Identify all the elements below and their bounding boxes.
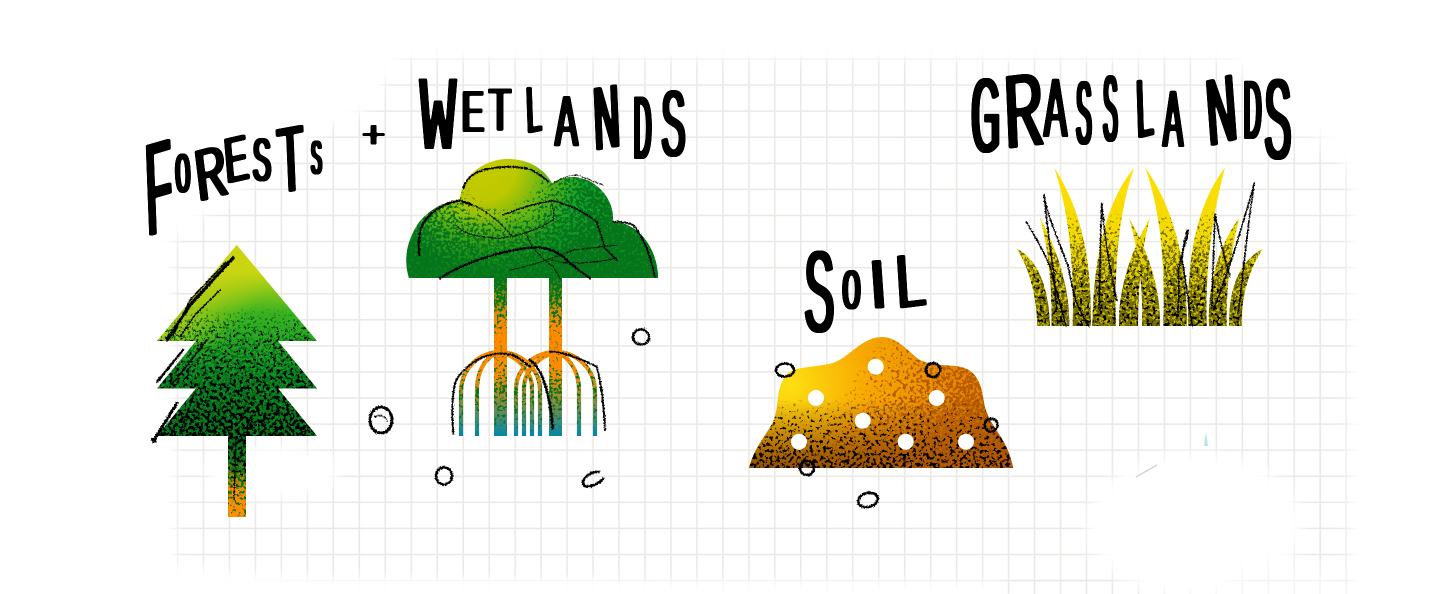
heading: forests + wetlands: S bbox=[311, 133, 322, 190]
heading: forests + wetlands: S bbox=[252, 129, 272, 201]
heading: grasslands: L bbox=[1130, 66, 1157, 166]
heading: forests + wetlands: O bbox=[171, 146, 193, 212]
heading: grasslands: A bbox=[1163, 76, 1183, 173]
heading: forests + wetlands: E bbox=[218, 125, 254, 205]
grass pencil strokes bbox=[1027, 183, 1254, 327]
heading: grasslands: D bbox=[1243, 67, 1262, 166]
mangrove pencil strokes bbox=[419, 167, 655, 433]
heading: grasslands: N bbox=[1197, 61, 1244, 178]
heading: forests + wetlands: F bbox=[134, 120, 180, 279]
heading: forests + wetlands: D bbox=[633, 80, 652, 188]
heading: forests + wetlands: A bbox=[555, 83, 578, 169]
heading: soil: L bbox=[889, 240, 931, 334]
pine tree pencil strokes bbox=[152, 258, 236, 500]
heading: forests + wetlands: L bbox=[521, 76, 545, 156]
heading: grasslands: G bbox=[970, 61, 1001, 186]
heading: soil: I bbox=[866, 245, 890, 324]
heading: forests + wetlands: T bbox=[488, 79, 512, 151]
icon: soil mound bbox=[745, 335, 1017, 470]
heading: forests + wetlands: E bbox=[461, 80, 485, 151]
faint teal and pencil remnants bbox=[1136, 432, 1208, 477]
heading: forests + wetlands: W bbox=[420, 61, 456, 182]
heading: grasslands: S bbox=[1076, 65, 1092, 173]
heading: grasslands bbox=[970, 55, 1292, 196]
mangrove trunks and roots bbox=[458, 278, 598, 436]
heading: grasslands: S bbox=[1103, 60, 1118, 171]
heading: grasslands: A bbox=[1044, 65, 1067, 164]
icon: mangrove tree bbox=[400, 155, 665, 440]
heading: forests + wetlands: N bbox=[587, 70, 624, 180]
icon: pine tree bbox=[150, 240, 325, 520]
heading: soil bbox=[804, 230, 931, 369]
mangrove canopy bbox=[400, 155, 665, 280]
soil white pores bbox=[791, 359, 974, 450]
heading: soil: O bbox=[842, 262, 861, 327]
heading: forests + wetlands bbox=[134, 61, 686, 279]
heading: grasslands: R bbox=[999, 55, 1047, 183]
heading: forests + wetlands: + bbox=[362, 116, 386, 161]
heading: soil: S bbox=[804, 230, 835, 369]
pencil-drawn pebbles bbox=[370, 330, 998, 509]
text: S bbox=[1264, 60, 1292, 196]
text: S bbox=[661, 75, 686, 186]
graph paper background bbox=[170, 58, 1352, 594]
heading: forests + wetlands: T bbox=[271, 111, 309, 224]
heading: forests + wetlands: R bbox=[187, 134, 234, 226]
icon: grass bbox=[1010, 165, 1268, 327]
